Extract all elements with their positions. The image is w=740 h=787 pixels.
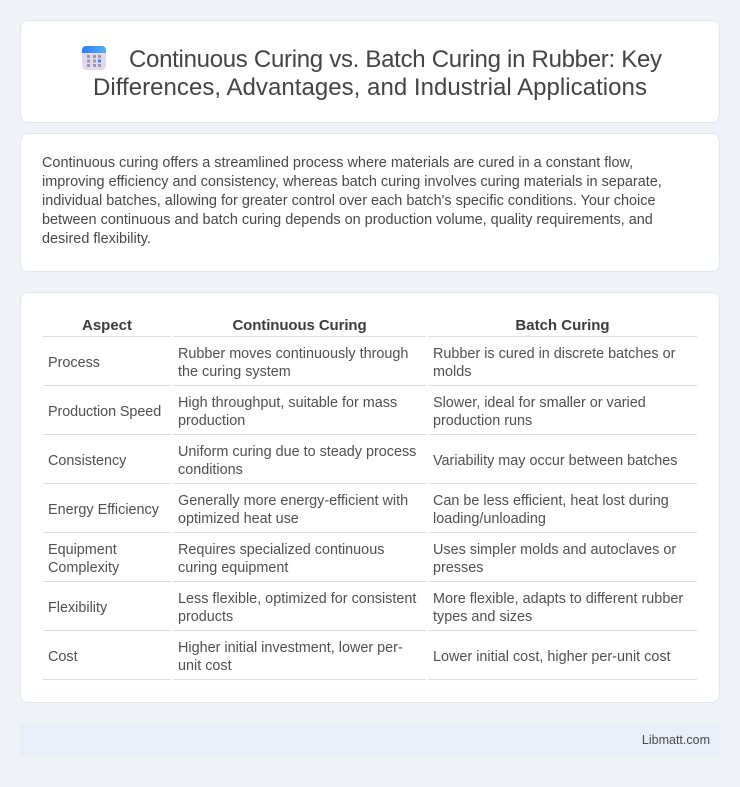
row: Cost: Higher initial investment, lower per-	[178, 640, 403, 656]
row: Flexibility: products	[178, 609, 233, 625]
row: Equipment Complexity: Equipment	[48, 542, 117, 558]
intro paragraph: Continuous curing offers a streamlined process where materials are cured in a constant flow,	[42, 155, 633, 171]
header: Aspect: Aspect	[82, 317, 132, 334]
row: Process	[48, 346, 676, 380]
title	[93, 46, 662, 101]
row: Energy Efficiency: Can be less efficient, heat lost during	[433, 493, 669, 509]
footer text: Libmatt.com	[642, 733, 710, 747]
row: Energy Efficiency: optimized heat use	[178, 511, 299, 527]
row: Equipment Complexity: Uses simpler molds and autoclaves or	[433, 542, 676, 558]
row: Equipment Complexity: Requires specialized continuous	[178, 542, 384, 558]
intro card	[20, 133, 720, 272]
row: Equipment Complexity	[48, 542, 676, 576]
row: Process: Rubber is cured in discrete batches or	[433, 346, 675, 362]
row: Equipment Complexity: presses	[433, 560, 483, 576]
row: Production Speed: High throughput, suitable for mass	[178, 395, 397, 411]
row: Consistency	[48, 444, 678, 478]
icon: calendar	[82, 46, 106, 70]
row: Production Speed: production	[178, 413, 245, 429]
title: Continuous Curing vs. Batch Curing in Rubber: Key	[129, 46, 662, 73]
row: Equipment Complexity: curing equipment	[178, 560, 288, 576]
row: Equipment Complexity: Complexity	[48, 560, 119, 576]
row: Cost: Cost	[48, 649, 78, 665]
row: Flexibility: types and sizes	[433, 609, 532, 625]
row: Consistency: conditions	[178, 462, 243, 478]
row: Energy Efficiency: Generally more energy-efficient with	[178, 493, 408, 509]
intro paragraph: individual batches, allowing for greater control over each batch's specific conditions. Your choice	[42, 193, 656, 209]
row: Energy Efficiency: Energy Efficiency	[48, 502, 159, 518]
row: Consistency: Uniform curing due to steady process	[178, 444, 416, 460]
row: Production Speed: production runs	[433, 413, 532, 429]
row: Cost	[48, 640, 671, 674]
intro paragraph: desired flexibility.	[42, 231, 151, 247]
row: Production Speed: Production Speed	[48, 404, 161, 420]
intro paragraph: between continuous and batch curing depends on production volume, quality requirements, and	[42, 212, 653, 228]
row: Cost: Lower initial cost, higher per-unit cost	[433, 649, 671, 665]
row: Flexibility: Flexibility	[48, 600, 107, 616]
footer bar	[20, 723, 720, 757]
title card	[20, 20, 720, 123]
row: Process: Rubber moves continuously through	[178, 346, 408, 362]
title: Differences, Advantages, and Industrial Applications	[93, 74, 647, 101]
row: Consistency: Variability may occur between batches	[433, 453, 678, 469]
row: Cost: unit cost	[178, 658, 232, 674]
table panel	[20, 292, 720, 703]
row: Process: Process	[48, 355, 100, 371]
row: Flexibility: More flexible, adapts to different rubber	[433, 591, 683, 607]
intro paragraph	[42, 155, 662, 247]
row: Production Speed	[48, 395, 646, 429]
row: Flexibility	[48, 591, 683, 625]
header: Continuous Curing: Continuous Curing	[232, 317, 367, 334]
comparison table	[43, 317, 697, 680]
row: Energy Efficiency: loading/unloading	[433, 511, 546, 527]
row: Consistency: Consistency	[48, 453, 126, 469]
row: Production Speed: Slower, ideal for smaller or varied	[433, 395, 646, 411]
row: Energy Efficiency	[48, 493, 669, 527]
intro paragraph: improving efficiency and consistency, whereas batch curing involves curing materials in separate,	[42, 174, 662, 190]
row: Process: molds	[433, 364, 471, 380]
row: Process: the curing system	[178, 364, 291, 380]
row: Flexibility: Less flexible, optimized for consistent	[178, 591, 416, 607]
header: Batch Curing: Batch Curing	[515, 317, 610, 334]
